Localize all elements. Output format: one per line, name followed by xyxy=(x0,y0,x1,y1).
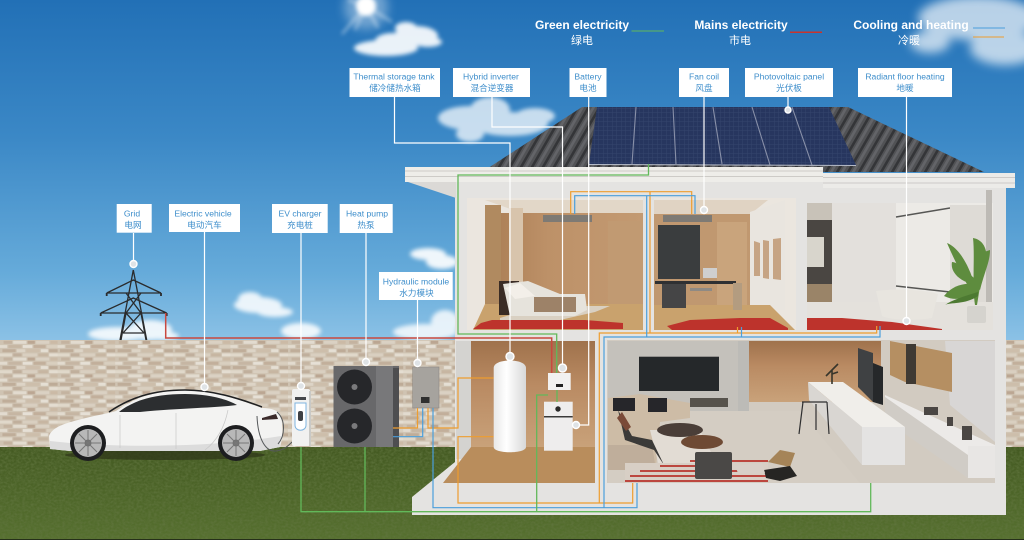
label: hydraulic module: 水力模块 xyxy=(399,287,434,298)
label: thermal storage tank xyxy=(350,68,514,360)
front wheel xyxy=(70,425,106,461)
label: thermal storage tank: Thermal storage tank xyxy=(353,72,435,82)
label: hybrid inverter: 混合逆变器 xyxy=(471,82,514,93)
label: electric vehicle: Electric vehicle xyxy=(174,208,232,218)
label: radiant floor heating: 地暖 xyxy=(896,82,914,93)
kitchen island xyxy=(808,382,905,465)
cloud: top right xyxy=(910,0,1024,65)
wood wall xyxy=(749,341,881,402)
car body xyxy=(49,390,282,451)
bedroom door xyxy=(608,221,640,306)
label: EV charger xyxy=(272,204,328,390)
car shadow xyxy=(65,450,265,460)
room: living and kitchen xyxy=(607,340,995,483)
label: EV charger: EV charger xyxy=(278,208,322,218)
clouds xyxy=(88,22,555,341)
EV charger unit xyxy=(292,389,311,446)
icon: pylon xyxy=(101,270,167,340)
house shell xyxy=(412,182,1006,515)
legend: green electricity: 绿电 xyxy=(571,33,593,47)
study right wall xyxy=(750,200,785,310)
legend: green electricity xyxy=(535,18,664,47)
legend: cooling and heating: Cooling and heating xyxy=(853,18,969,32)
pot xyxy=(967,306,986,323)
electric vehicle xyxy=(49,390,292,461)
right cornice xyxy=(823,173,1015,188)
coffee table xyxy=(657,423,732,479)
kitchen right wall xyxy=(945,341,995,442)
hydraulic module unit xyxy=(413,367,439,408)
room: bedroom xyxy=(467,198,643,330)
label: radiant floor heating: Radiant floor heating xyxy=(865,72,945,82)
study floor heating xyxy=(667,318,788,330)
label: grid: 电网 xyxy=(124,219,142,230)
label: heat pump xyxy=(340,204,393,366)
label: fan coil: 风盘 xyxy=(695,82,713,93)
marble TV wall xyxy=(608,341,739,411)
cooling and heating blue pipework xyxy=(393,196,880,508)
left cornice xyxy=(405,167,823,182)
brick wall xyxy=(0,340,1024,448)
car lower shade xyxy=(50,436,281,451)
battery unit xyxy=(544,402,573,451)
label: fan coil: Fan coil xyxy=(689,72,719,82)
tub xyxy=(876,290,938,320)
bedroom ceiling xyxy=(485,200,643,216)
label: heat pump: 热泵 xyxy=(357,219,375,230)
label: hydraulic module xyxy=(379,272,453,366)
label: electric vehicle: 电动汽车 xyxy=(187,219,222,230)
label: fan coil xyxy=(679,68,729,214)
legend: cooling and heating: 冷暖 xyxy=(898,34,920,47)
plant xyxy=(944,238,990,305)
dark wall xyxy=(807,220,832,284)
bedroom AC unit xyxy=(543,215,592,222)
label: battery xyxy=(570,68,606,428)
fan lower xyxy=(337,408,372,444)
door xyxy=(717,222,747,305)
label: battery: 电池 xyxy=(579,82,597,93)
label: electric vehicle xyxy=(169,204,240,390)
room: bathroom xyxy=(807,190,993,330)
study floor xyxy=(654,305,795,330)
shelf xyxy=(658,225,700,279)
label: EV charger: 充电桩 xyxy=(287,219,313,230)
bar stool xyxy=(799,402,829,434)
car windows xyxy=(119,394,237,412)
window strip xyxy=(896,208,950,292)
paintings xyxy=(754,238,781,280)
legend: mains electricity xyxy=(694,18,822,47)
car roof line xyxy=(109,390,262,412)
photovoltaic panel array xyxy=(589,107,856,166)
legend: mains electricity: 市电 xyxy=(729,33,751,47)
roof xyxy=(482,107,984,172)
charging cable xyxy=(257,412,292,451)
legend: mains electricity: Mains electricity xyxy=(694,18,788,32)
utility wood wall xyxy=(471,341,595,448)
TV console xyxy=(690,398,728,407)
legend: cooling and heating xyxy=(853,18,1005,47)
sofa xyxy=(608,394,720,470)
bedroom floor heating xyxy=(473,320,623,329)
sky background xyxy=(0,0,1024,342)
label: grid: Grid xyxy=(124,208,140,218)
legend: green electricity: Green electricity xyxy=(535,18,629,32)
living floor xyxy=(608,411,860,483)
bathroom floor heating xyxy=(807,318,942,330)
label: hybrid inverter: Hybrid inverter xyxy=(463,72,519,82)
car door lines xyxy=(120,410,228,450)
grass xyxy=(0,447,1024,540)
utility wood floor xyxy=(443,447,595,483)
desk xyxy=(655,268,742,310)
oven xyxy=(873,363,883,405)
label: thermal storage tank: 储冷储热水箱 xyxy=(369,82,421,93)
icon: sun xyxy=(342,0,392,34)
label: heat pump: Heat pump xyxy=(346,208,388,218)
car tail light xyxy=(262,414,278,420)
heat pump unit xyxy=(334,366,399,447)
fan upper xyxy=(337,370,372,404)
study wood wall xyxy=(654,214,750,306)
green electricity pipework xyxy=(301,164,871,512)
mains electricity pipework xyxy=(166,313,552,373)
upper cabinets xyxy=(890,341,952,392)
bed xyxy=(499,281,587,316)
vase plant xyxy=(826,364,838,384)
label: photovoltaic panel: 光伏板 xyxy=(776,82,802,93)
floor xyxy=(807,302,993,330)
bedroom wood wall xyxy=(485,213,643,308)
red striped rug xyxy=(625,461,768,482)
label: battery: Battery xyxy=(574,72,602,82)
label: hybrid inverter xyxy=(453,68,566,372)
room: study xyxy=(654,198,796,330)
TV xyxy=(639,357,719,391)
thermal storage tank unit xyxy=(494,360,526,452)
floor cushions xyxy=(735,450,797,481)
label: photovoltaic panel: Photovoltaic panel xyxy=(754,72,824,82)
kitchen counter xyxy=(885,395,995,478)
label: grid xyxy=(117,204,152,268)
label: hydraulic module: Hydraulic module xyxy=(383,276,449,286)
study AC unit xyxy=(663,215,712,222)
marble panel xyxy=(832,203,896,305)
hybrid inverter unit xyxy=(548,373,571,390)
room: utility xyxy=(443,341,595,483)
cooling and heating orange pipework xyxy=(393,192,877,503)
kitchen appliances xyxy=(924,407,972,440)
study ceiling xyxy=(654,200,768,216)
rear wheel xyxy=(218,425,254,461)
curtains xyxy=(950,205,986,305)
label: radiant floor heating xyxy=(858,68,952,324)
fridge xyxy=(858,348,873,402)
label: photovoltaic panel xyxy=(745,68,833,113)
soffit xyxy=(405,181,456,198)
bedroom floor xyxy=(473,304,643,330)
